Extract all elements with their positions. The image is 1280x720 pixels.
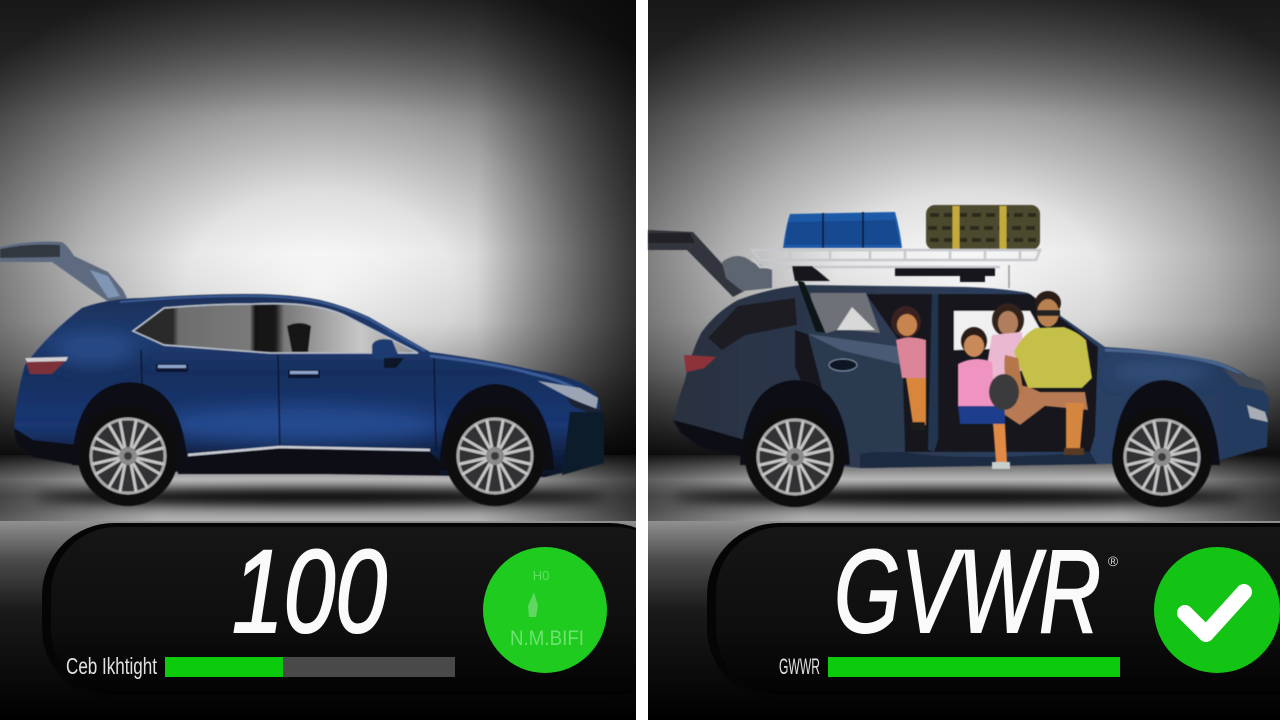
sill bbox=[178, 448, 440, 474]
right gauge panel bbox=[707, 523, 1280, 700]
open door bbox=[795, 330, 905, 457]
progress label: Ceb Ikhtight bbox=[66, 653, 157, 679]
status badge with check mark bbox=[1154, 547, 1280, 673]
right car: loaded SUV bbox=[648, 230, 1269, 507]
status badge bbox=[483, 547, 607, 673]
rack mounts bbox=[792, 266, 995, 282]
rear wheel arch bbox=[740, 380, 850, 465]
rear bumper bbox=[14, 428, 78, 465]
left car: blue SUV with open tailgate bbox=[0, 242, 604, 506]
rear wheel bbox=[78, 406, 178, 506]
status badge: N.M.BIFI bbox=[510, 627, 584, 650]
fender shine bbox=[1110, 364, 1210, 380]
front wheel bbox=[445, 406, 545, 506]
roof highlight bbox=[120, 296, 425, 351]
headlamp bbox=[538, 381, 598, 410]
rack rails bbox=[752, 250, 1040, 267]
left studio background bbox=[0, 0, 636, 720]
blue bag bbox=[783, 212, 902, 248]
rear wheel bbox=[745, 407, 845, 507]
status badge: H0 bbox=[533, 568, 549, 583]
front wheel arch bbox=[439, 384, 554, 470]
big label: GVWR bbox=[834, 526, 1101, 658]
right studio background bbox=[648, 0, 1280, 720]
family sitting in the car bbox=[891, 291, 1092, 469]
registered mark: ® bbox=[1108, 553, 1119, 569]
rear bumper bbox=[673, 420, 745, 457]
progress label: GWWR bbox=[779, 654, 820, 679]
rear lamp bbox=[684, 355, 716, 372]
progress bar bbox=[165, 657, 455, 677]
divider bbox=[636, 0, 648, 720]
roof rack with luggage bbox=[752, 205, 1040, 288]
headlamp bbox=[1222, 368, 1268, 392]
woman in back bbox=[984, 303, 1024, 382]
door shine bbox=[160, 405, 440, 445]
progress bar bbox=[828, 657, 1120, 677]
tailgate trim bbox=[722, 256, 772, 291]
rear lamp bbox=[25, 358, 68, 374]
car body bbox=[673, 285, 1269, 468]
bright window bbox=[954, 311, 1050, 350]
open tailgate bbox=[648, 230, 746, 297]
girl bbox=[891, 306, 926, 430]
B pillar bbox=[928, 294, 938, 452]
left panel: curb weight bbox=[0, 0, 682, 720]
left gauge panel bbox=[42, 523, 682, 700]
big value: 100 bbox=[232, 526, 387, 658]
hood highlight bbox=[1105, 350, 1250, 383]
woman in front bbox=[958, 327, 1010, 469]
door handle bbox=[829, 359, 857, 371]
door handles bbox=[156, 364, 188, 372]
man in yellow shirt bbox=[989, 291, 1092, 455]
front wheel arch bbox=[1112, 380, 1220, 465]
right panel: GVWR bbox=[648, 0, 1280, 720]
door seam lines bbox=[141, 350, 436, 452]
rear side window bbox=[810, 293, 880, 335]
seat in window bbox=[287, 323, 311, 352]
rear wheel arch bbox=[72, 382, 188, 470]
open tailgate bbox=[0, 242, 127, 303]
side windows bbox=[133, 304, 418, 353]
rear quarter window bbox=[708, 298, 797, 350]
car body bbox=[14, 294, 604, 477]
front wheel bbox=[1112, 407, 1212, 507]
hood highlight bbox=[430, 356, 590, 398]
wing mirror bbox=[372, 339, 398, 360]
sill bbox=[860, 452, 1097, 468]
rear quarter shine bbox=[55, 334, 135, 366]
interior opening bbox=[866, 294, 1098, 452]
front bumper bbox=[562, 412, 604, 475]
camo bag bbox=[926, 205, 1040, 250]
window frame bbox=[797, 280, 835, 360]
